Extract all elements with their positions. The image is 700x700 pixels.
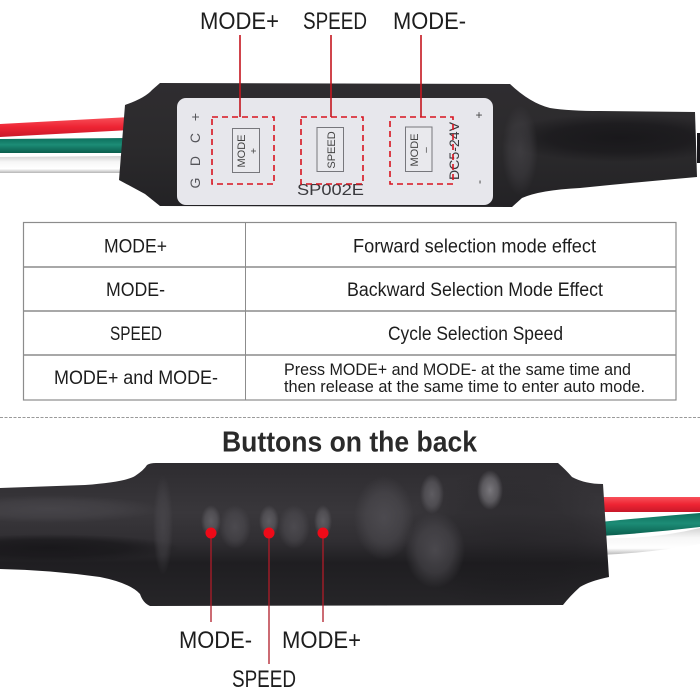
cable stub [697, 133, 700, 163]
callout: MODE-: MODE- [393, 8, 466, 35]
row: MODE- [106, 280, 604, 301]
top device photo [0, 83, 700, 207]
button: MODE minus: MODE [409, 134, 421, 166]
row: SPEED: Cycle Selection Speed [388, 324, 563, 345]
terminal labels [187, 113, 203, 188]
terminal labels: + [187, 113, 203, 121]
body shading and button bumps [0, 472, 560, 583]
panel printing [187, 108, 486, 199]
table grid [23, 222, 676, 400]
wires: red, green, white [600, 497, 700, 555]
heading: Buttons on the back: Buttons on the back [222, 426, 477, 458]
terminal labels: C [187, 133, 203, 143]
row: MODE+ [104, 236, 597, 258]
row: MODE+: Forward selection mode effect [353, 236, 597, 258]
cable shading [506, 118, 696, 184]
model number: SP002E [297, 182, 364, 199]
wires: red, green, white [0, 117, 130, 173]
row: MODE+ and MODE-: MODE+ and MODE- [54, 368, 218, 389]
row: MODE+ and MODE- [54, 361, 645, 396]
terminal labels: G [187, 178, 203, 188]
row: SPEED [110, 324, 563, 345]
button: MODE plus: MODE [236, 134, 248, 168]
callout: SPEED [301, 8, 367, 184]
row: MODE-: Backward Selection Mode Effect [347, 280, 604, 301]
row: MODE-: MODE- [106, 280, 165, 301]
callout: MODE-: MODE- [179, 627, 252, 654]
callout: MODE- [390, 8, 466, 184]
callout: SPEED: SPEED [303, 8, 367, 35]
label panel [177, 98, 493, 205]
row: MODE+: MODE+ [104, 236, 167, 258]
callout: SPEED: SPEED [232, 666, 296, 693]
callout: MODE+ [282, 528, 361, 654]
row: SPEED: SPEED [110, 324, 162, 345]
button: MODE minus: – [421, 147, 432, 153]
back callouts [179, 528, 361, 693]
button: SPEED [317, 128, 344, 172]
button: MODE plus: + [249, 148, 260, 154]
polarity marks [472, 108, 486, 184]
voltage label: DC5-24V [446, 121, 462, 180]
button: MODE minus [406, 127, 432, 172]
back device photo [0, 463, 700, 610]
callout: MODE+: MODE+ [282, 627, 361, 654]
function table [23, 222, 676, 400]
terminal labels: D [187, 156, 203, 166]
callout: MODE+ [200, 8, 279, 184]
shrink-wrap body [0, 463, 609, 606]
button: MODE plus [232, 128, 260, 172]
controller shrink-wrap body [119, 83, 697, 207]
polarity marks: + [475, 108, 483, 122]
polarity marks: - [472, 180, 486, 184]
top callouts [200, 8, 466, 184]
row: MODE+ and MODE-: then release at the same time to enter auto mode. [284, 378, 645, 396]
row: MODE+ and MODE-: Press MODE+ and MODE- at the same time and [284, 361, 631, 379]
button: SPEED: SPEED [326, 131, 338, 169]
callout: MODE+: MODE+ [200, 8, 279, 35]
callout: SPEED [232, 528, 296, 693]
callout: MODE- [179, 528, 252, 654]
